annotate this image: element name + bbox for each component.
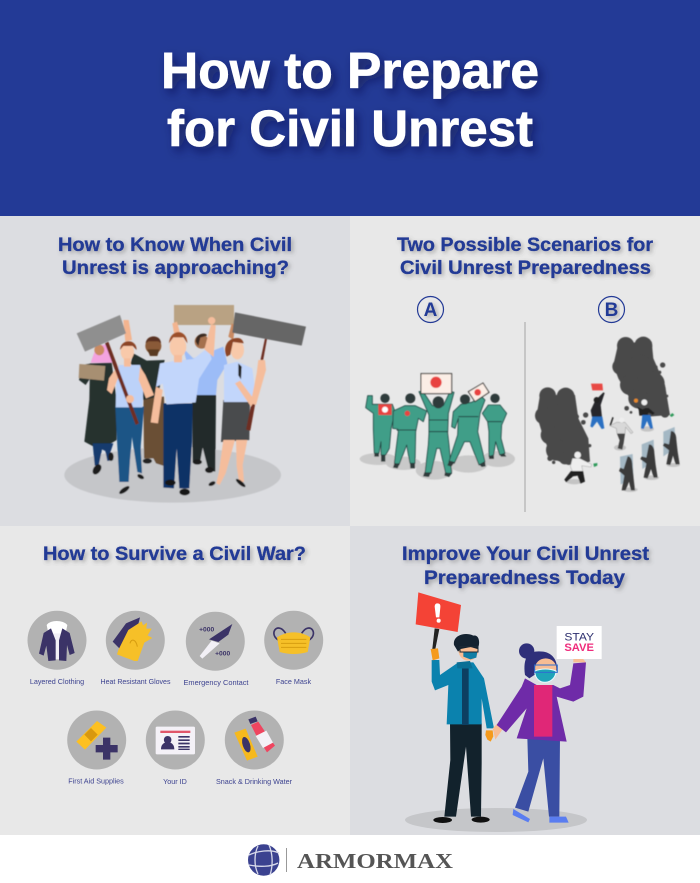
divider [524, 322, 526, 512]
item: heat resistant gloves: Heat Resistant Gloves [100, 677, 171, 686]
man in blue shirt at back [183, 334, 227, 473]
item: layered clothing: Layered Clothing [30, 677, 84, 686]
item: face mask: Face Mask [276, 677, 311, 686]
heading: two scenarios: Civil Unrest Preparedness [400, 257, 651, 279]
item: first aid supplies: First Aid Supplies [68, 776, 124, 786]
sign left [77, 315, 126, 352]
heading: how to know [58, 234, 292, 279]
panel: how to know [0, 216, 350, 526]
title [161, 42, 539, 157]
item: your ID: Your ID [163, 777, 187, 786]
panel: survive [0, 526, 350, 835]
item: snack and drinking water: Snack & Drinking Water [216, 777, 293, 786]
sign: stay save [557, 626, 602, 659]
woman [493, 643, 586, 823]
heading: improve preparedness: Improve Your Civil Unrest [402, 543, 650, 565]
title: for Civil Unrest [167, 100, 533, 157]
item: layered clothing [28, 611, 86, 686]
item: emergency contact: Emergency Contact [184, 678, 248, 687]
item: your ID [146, 710, 205, 786]
item: snack and drinking water [216, 710, 293, 786]
heading: how to know: How to Know When Civil [58, 234, 292, 256]
badge B: B [605, 300, 618, 321]
heading: survive: How to Survive a Civil War? [43, 543, 306, 565]
rioter with bat [610, 417, 633, 451]
illustration: scenario B riot and smoke [535, 337, 680, 492]
woman in hijab [79, 344, 117, 476]
logo: globe [248, 844, 279, 876]
title: How to Prepare [161, 42, 539, 99]
heading: two scenarios [397, 234, 653, 279]
item: emergency contact: +000 [199, 626, 214, 633]
rioter throwing [564, 452, 592, 484]
item: heat resistant gloves [100, 611, 171, 686]
rioter with flag [590, 392, 605, 429]
smoke cloud left [535, 387, 591, 465]
man [416, 592, 494, 823]
illustration: protest crowd [64, 305, 306, 503]
item: face mask [264, 611, 323, 686]
item: emergency contact: +000 [215, 651, 230, 658]
footer [0, 835, 700, 883]
riot police [619, 427, 680, 492]
logo divider [286, 848, 287, 872]
rioter with torch [634, 399, 655, 432]
badge B [598, 296, 624, 322]
panel: improve preparedness [350, 526, 700, 835]
heading: improve preparedness [402, 543, 650, 589]
heading: improve preparedness: Preparedness Today [424, 567, 625, 589]
badge A: A [424, 300, 438, 321]
item: first aid supplies [67, 710, 126, 786]
header banner [0, 0, 700, 216]
heading: how to know: Unrest is approaching? [62, 257, 289, 279]
illustration: scenario A protesters [360, 374, 515, 480]
man with beard [131, 336, 166, 467]
smoke cloud right [612, 337, 670, 418]
sign: stay save: SAVE [564, 642, 594, 654]
heading: two scenarios: Two Possible Scenarios for [397, 234, 653, 256]
illustration: couple with masks and signs [405, 592, 602, 832]
panel: two scenarios [350, 216, 700, 526]
woman in light shirt [105, 341, 154, 495]
logo wordmark: ARMORMAX [297, 849, 453, 873]
sign: stay save: STAY [564, 632, 595, 644]
woman in skirt [208, 338, 267, 488]
badge A [418, 296, 444, 322]
man in front [151, 317, 216, 495]
item: emergency contact [184, 612, 248, 687]
